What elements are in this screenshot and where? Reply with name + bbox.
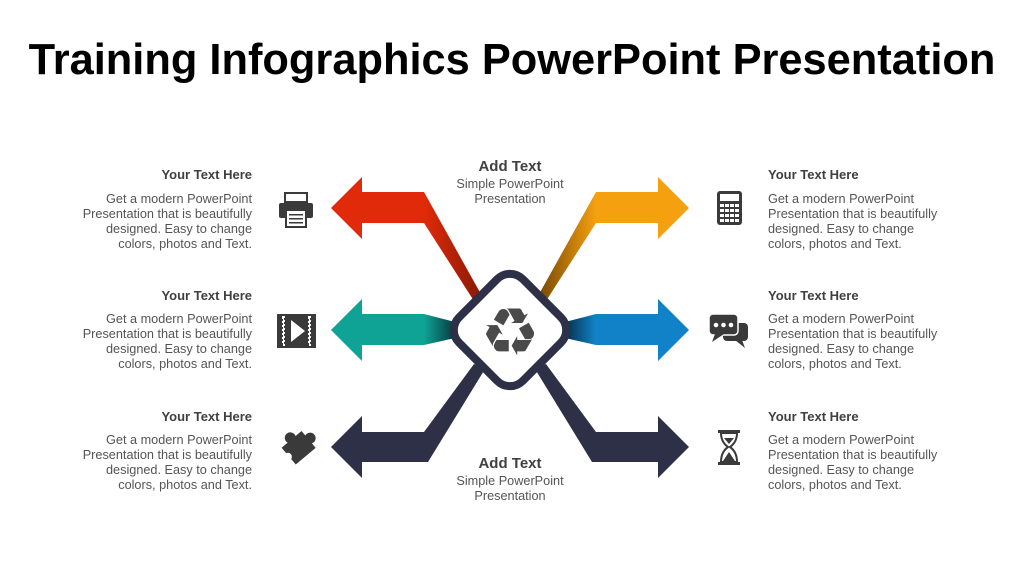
right text 1: designed. Easy to change xyxy=(768,222,914,236)
icon: chat xyxy=(709,314,748,348)
right text 1 xyxy=(768,167,938,251)
left text 1: colors, photos and Text. xyxy=(118,237,252,251)
arrow: teal middle-left xyxy=(331,299,455,361)
right text 3: Get a modern PowerPoint xyxy=(768,433,914,447)
right text 2: colors, photos and Text. xyxy=(768,357,902,371)
left text 2: Your Text Here xyxy=(161,288,252,303)
right text 3: Your Text Here xyxy=(768,409,859,424)
left text 2: Presentation that is beautifully xyxy=(83,327,253,341)
left text 2: designed. Easy to change xyxy=(106,342,252,356)
left text 3: Presentation that is beautifully xyxy=(83,448,253,462)
left text 3: Get a modern PowerPoint xyxy=(106,433,252,447)
right text 1: Your Text Here xyxy=(768,167,859,182)
right text 2 xyxy=(768,288,938,371)
right text 2: designed. Easy to change xyxy=(768,342,914,356)
left text 2: Get a modern PowerPoint xyxy=(106,312,252,326)
center top text: Add Text xyxy=(478,158,542,175)
center bottom text: Add Text xyxy=(478,455,542,472)
left text 1: designed. Easy to change xyxy=(106,222,252,236)
icon: printer xyxy=(279,193,313,227)
center top text: Simple PowerPoint xyxy=(456,177,564,191)
right text 3: Presentation that is beautifully xyxy=(768,448,938,462)
left text 3: Your Text Here xyxy=(161,409,252,424)
right text 2: Presentation that is beautifully xyxy=(768,327,938,341)
left text 2: colors, photos and Text. xyxy=(118,357,252,371)
arrow: dark bottom-left xyxy=(331,364,485,478)
center bottom text: Presentation xyxy=(474,489,546,503)
arrow: blue middle-right xyxy=(565,299,689,361)
icon: puzzle xyxy=(273,420,321,468)
right text 1: Get a modern PowerPoint xyxy=(768,192,914,206)
right text 3: colors, photos and Text. xyxy=(768,478,902,492)
icon: film xyxy=(277,314,316,348)
left text 1: Your Text Here xyxy=(161,167,252,182)
icon: recycle: ♻ xyxy=(480,294,540,371)
right text 2: Get a modern PowerPoint xyxy=(768,312,914,326)
left text 3 xyxy=(83,409,253,492)
right text 3 xyxy=(768,409,938,492)
arrow: red top-left xyxy=(331,177,482,301)
center bottom text: Simple PowerPoint xyxy=(456,474,564,488)
arrow: orange top-right xyxy=(538,177,689,301)
left text 1: Presentation that is beautifully xyxy=(83,207,253,221)
center diamond xyxy=(446,266,574,394)
right text 3: designed. Easy to change xyxy=(768,463,914,477)
left text 3: designed. Easy to change xyxy=(106,463,252,477)
left text 3: colors, photos and Text. xyxy=(118,478,252,492)
right text 1: Presentation that is beautifully xyxy=(768,207,938,221)
arrow: dark bottom-right xyxy=(535,364,689,478)
left text 2 xyxy=(83,288,253,371)
left text 1 xyxy=(83,167,253,251)
center top text: Presentation xyxy=(474,192,546,206)
center top text xyxy=(456,158,564,206)
icon: calculator xyxy=(717,191,742,225)
title: Training Infographics PowerPoint Presentation xyxy=(29,36,995,84)
right text 2: Your Text Here xyxy=(768,288,859,303)
center bottom text xyxy=(456,455,564,503)
left text 1: Get a modern PowerPoint xyxy=(106,192,252,206)
icon: hourglass xyxy=(718,430,740,465)
right text 1: colors, photos and Text. xyxy=(768,237,902,251)
